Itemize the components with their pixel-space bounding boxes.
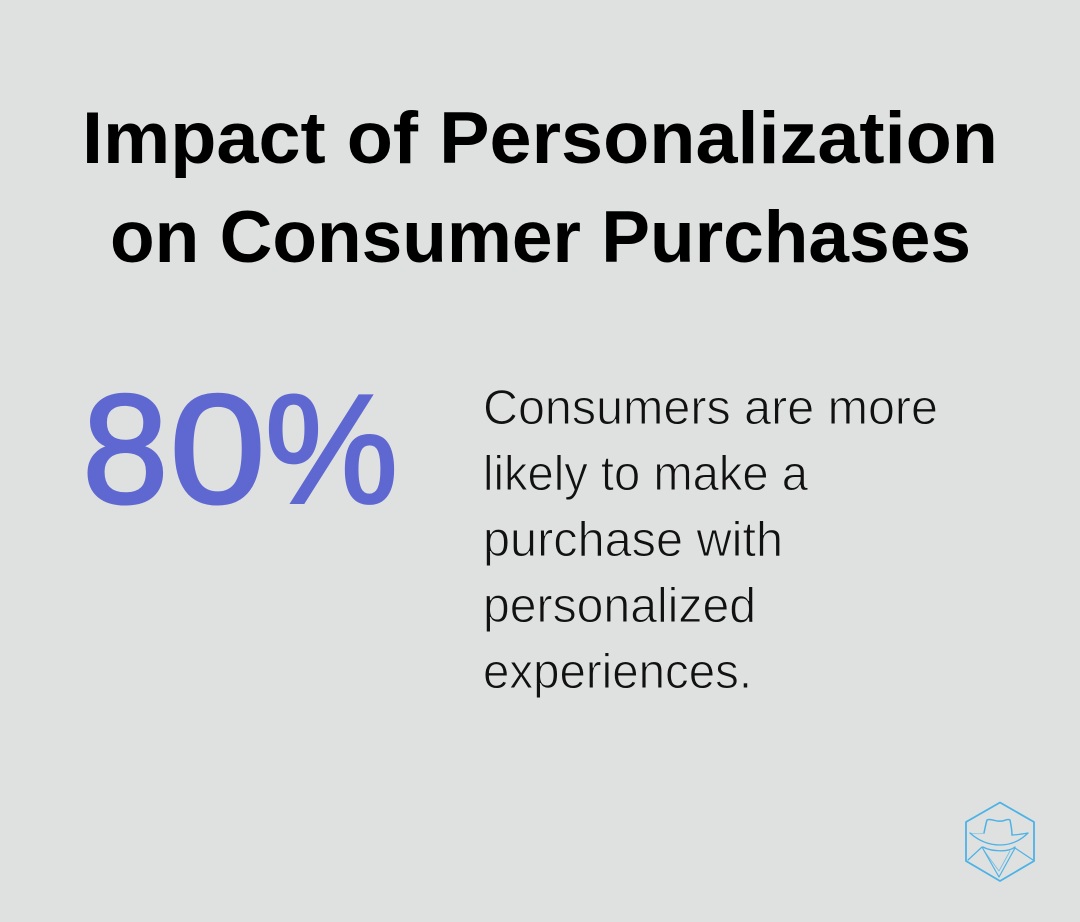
big statistic: 80%: 0: [170, 362, 266, 536]
description text: personalized: [483, 579, 756, 633]
description text: Consumers are more: [483, 381, 938, 435]
title: on Consumer Purchases: [110, 197, 971, 278]
icon: hexagon logo with hat-wearing figure: [966, 802, 1034, 881]
title: [82, 98, 998, 278]
description text: likely to make a: [483, 447, 809, 501]
description text: experiences.: [483, 645, 752, 699]
title: Impact of Personalization: [82, 98, 998, 179]
description text: purchase with: [483, 513, 783, 567]
big statistic: 80%: [82, 362, 398, 536]
big statistic: 80%: %: [265, 362, 398, 536]
description text: [483, 381, 938, 699]
big statistic: 80%: 8: [82, 362, 168, 536]
